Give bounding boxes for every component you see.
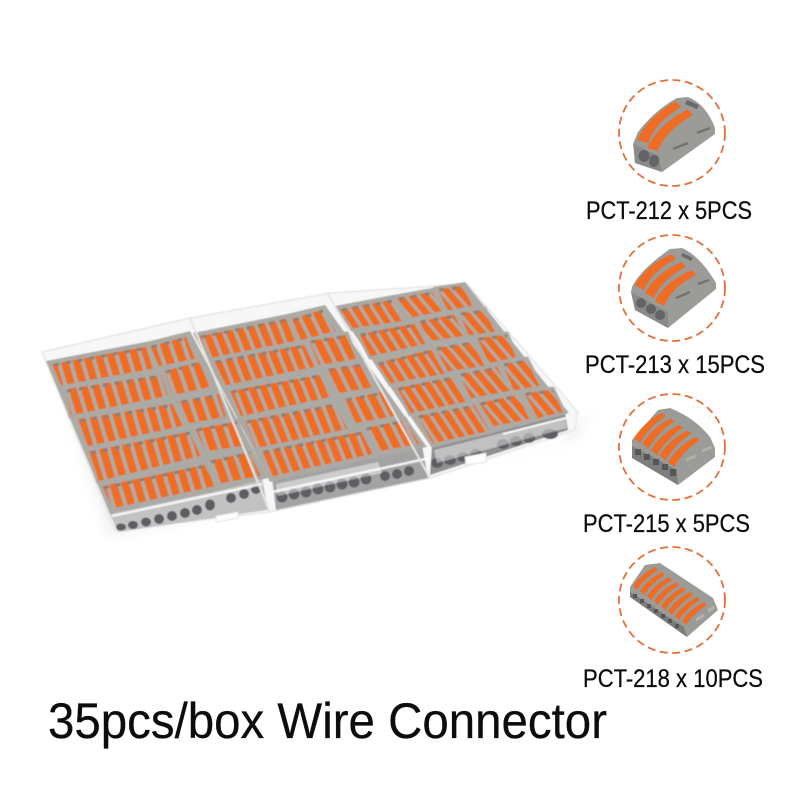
- label: PCT-212 x 5PCS: PCT-212 x 5PCS: [586, 197, 752, 225]
- right block 5a: [477, 393, 532, 428]
- middle tray base: [193, 305, 427, 482]
- icon: 5-way connector: [632, 408, 715, 485]
- left row 4: [87, 430, 203, 483]
- icon: 3-way connector: [631, 248, 716, 328]
- middle compartment connectors: [193, 305, 427, 482]
- dashed circle PCT-218: [619, 547, 725, 653]
- left row 2: [63, 373, 170, 417]
- lid reflections and dividers: [112, 294, 567, 522]
- icon: 2-way connector: [633, 97, 715, 172]
- left small block 1: [148, 335, 197, 368]
- box shadow: [60, 380, 590, 535]
- right row 4: [395, 375, 468, 415]
- right row 5: [415, 403, 492, 445]
- middle row 5: [260, 430, 375, 478]
- middle row 2: [212, 343, 317, 387]
- dashed circle PCT-212: [619, 80, 725, 186]
- right block 4a: [457, 365, 512, 400]
- dashed circle PCT-213: [619, 235, 725, 341]
- left small block 4: [193, 420, 247, 453]
- dashed circle PCT-215: [619, 394, 725, 500]
- right block 2b: [457, 308, 497, 337]
- item: PCT-212: [586, 80, 752, 225]
- left compartment connectors: [46, 331, 268, 514]
- front faces with wire holes: [108, 413, 568, 532]
- right row 2: [357, 322, 428, 358]
- item: PCT-213: [585, 235, 765, 379]
- left small block 2: [162, 360, 212, 397]
- clear plastic box: [42, 284, 578, 530]
- middle row 1: [197, 317, 298, 360]
- right block 2a: [417, 313, 467, 343]
- right block 1b: [435, 284, 475, 312]
- right row 3: [375, 348, 447, 385]
- title: 35pcs/box Wire Connector: [48, 693, 607, 749]
- product photo: connector storage box: [42, 282, 578, 532]
- right block 4b: [500, 358, 542, 392]
- label: PCT-213 x 15PCS: PCT-213 x 15PCS: [585, 351, 765, 379]
- icon: 8-way connector: [630, 563, 718, 637]
- middle row 3: [228, 373, 333, 418]
- right block 1a: [395, 290, 445, 320]
- middle small block 4: [343, 390, 398, 425]
- left small block 3: [178, 392, 228, 425]
- right block 3a: [433, 340, 487, 373]
- right tray base: [335, 282, 569, 448]
- left row 1: [50, 345, 155, 387]
- left small block 5: [207, 450, 263, 485]
- left row 3: [76, 402, 185, 448]
- item: PCT-215: [583, 394, 750, 538]
- right row 1: [338, 298, 407, 330]
- label: PCT-218 x 10PCS: PCT-218 x 10PCS: [583, 665, 763, 693]
- right compartment connectors: [335, 282, 569, 448]
- middle small block 1: [290, 308, 338, 342]
- middle small block 3: [325, 362, 377, 395]
- left tray base: [46, 331, 268, 514]
- label: PCT-215 x 5PCS: PCT-215 x 5PCS: [583, 510, 750, 538]
- right block 3b: [475, 333, 518, 365]
- right block 5b: [522, 388, 565, 420]
- middle small block 2: [307, 333, 358, 367]
- middle small block 5: [363, 418, 422, 453]
- left row 5: [100, 463, 218, 510]
- middle row 4: [243, 402, 350, 450]
- item: PCT-218: [583, 547, 763, 693]
